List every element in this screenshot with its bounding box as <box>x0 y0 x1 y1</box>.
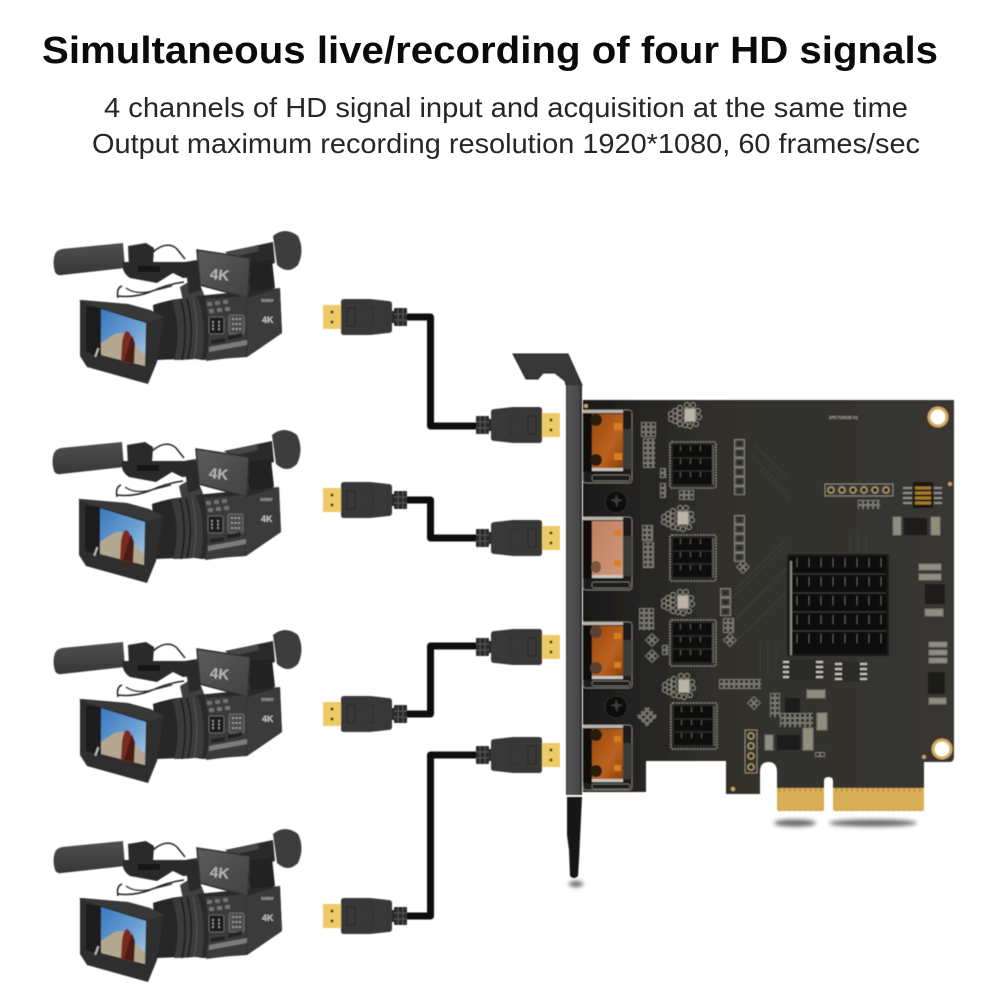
large heatsink <box>788 555 888 655</box>
bracket top flange <box>513 354 582 385</box>
screw 2 <box>605 696 627 718</box>
camcorder 1: 4K <box>209 266 230 285</box>
subtitle: 4 channels of HD signal input and acquisition at the same time <box>104 92 908 123</box>
title: Simultaneous live/recording of four HD signals <box>42 30 938 72</box>
camcorder 1: 4K <box>262 315 274 325</box>
camcorder 3 <box>54 630 302 783</box>
camcorder 2: SONY <box>260 497 273 502</box>
screw 1 <box>605 491 627 513</box>
component strips <box>636 422 825 757</box>
camcorder 3: SONY <box>261 697 274 702</box>
camcorder 3: 4K <box>262 714 274 724</box>
camcorder 4: 4K <box>209 864 230 883</box>
HDMI cable 4 <box>323 737 560 934</box>
HDMI cable 3 <box>323 629 560 732</box>
gold dots <box>584 404 952 791</box>
camcorder 2 <box>52 430 300 583</box>
HDMI cable 1 <box>323 299 560 443</box>
chip clusters <box>662 402 702 700</box>
camcorder 4: 4K <box>262 913 274 923</box>
camcorder 2: 4K <box>208 465 229 484</box>
PCB traces <box>725 445 866 675</box>
camcorder 1 <box>54 231 302 384</box>
subtitle: Output maximum recording resolution 1920*1080, 60 frames/sec <box>92 128 920 159</box>
gold fingers <box>777 785 924 811</box>
camcorder 4 <box>54 829 302 982</box>
HDMI cable 2 <box>323 482 560 556</box>
surface-mount chips <box>765 517 947 750</box>
mounting holes <box>929 408 951 758</box>
small heatsinks <box>670 442 717 749</box>
HDMI port 2 <box>583 517 632 590</box>
bracket lower tab <box>567 797 582 878</box>
camcorder 1: SONY <box>261 298 274 303</box>
HDMI port 4 <box>583 725 632 790</box>
camcorder 4: SONY <box>261 896 274 901</box>
HDMI port 3 <box>583 622 632 688</box>
card shadows <box>569 820 917 887</box>
subtitle <box>92 92 920 159</box>
HDMI port 1 <box>583 410 632 483</box>
PCB board <box>583 400 954 794</box>
capture card <box>513 354 954 887</box>
camcorder 2: 4K <box>261 514 273 524</box>
bracket face <box>566 385 582 795</box>
board silkscreen label: 2RCT20936 V1 <box>829 415 858 420</box>
DIP switch <box>903 482 942 508</box>
camcorder 3: 4K <box>209 665 230 684</box>
header pins <box>825 484 893 509</box>
vertical header <box>745 730 757 773</box>
